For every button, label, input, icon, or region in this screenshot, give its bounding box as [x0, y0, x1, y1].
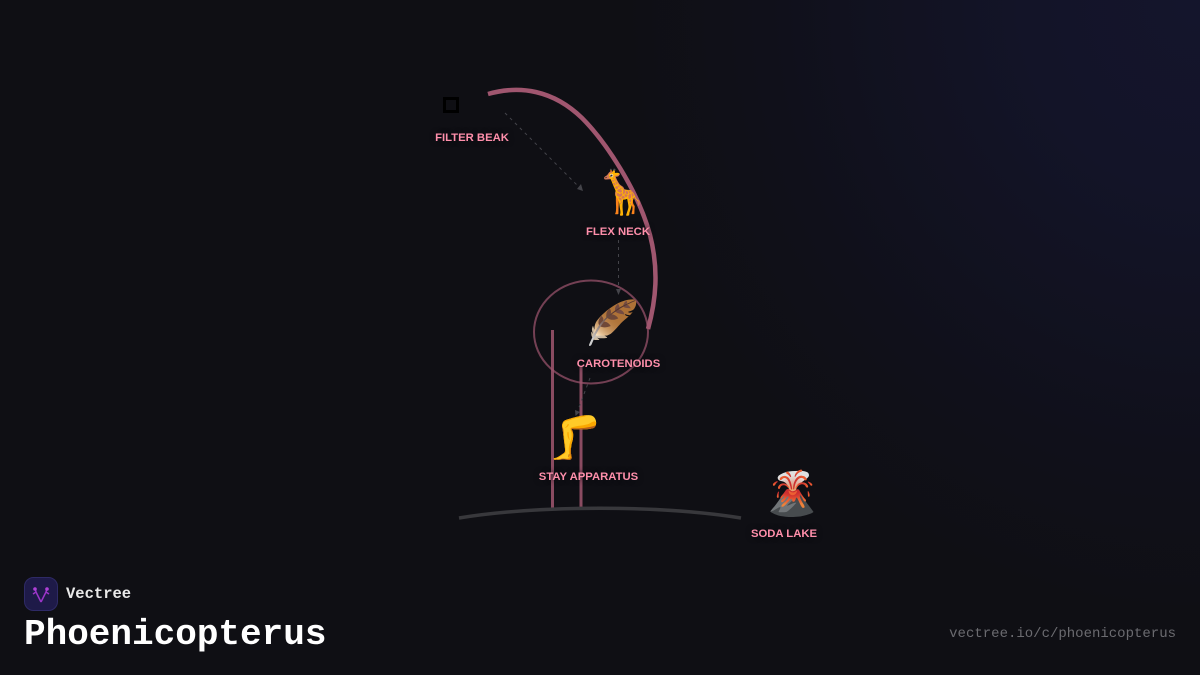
ground line	[459, 508, 741, 518]
source url: vectree.io/c/phoenicopterus	[949, 626, 1176, 642]
icon: feather: 🪶	[586, 299, 640, 349]
label: soda lake: SODA LAKE	[751, 528, 817, 540]
leg left	[551, 330, 554, 509]
arrow: feathers to legs	[575, 378, 590, 416]
label: filter beak: FILTER BEAK	[435, 132, 509, 144]
leg right	[580, 367, 582, 509]
icon: leg: 🦵	[548, 413, 602, 463]
body ellipse	[534, 280, 648, 384]
arrow: neck to feathers	[616, 240, 621, 295]
arrow: beak to neck	[505, 113, 583, 191]
label: carotenoids: CAROTENOIDS	[577, 358, 660, 370]
logo	[24, 577, 58, 611]
icon: filter beak	[442, 97, 458, 113]
label: flex neck: FLEX NECK	[586, 226, 650, 238]
icon: giraffe: 🦒	[595, 168, 649, 218]
icon: volcano: 🌋	[765, 469, 819, 519]
neck curve	[488, 90, 656, 329]
title: Phoenicopterus	[24, 614, 326, 655]
label: stay apparatus: STAY APPARATUS	[539, 470, 638, 482]
brand name: Vectree	[66, 584, 131, 602]
